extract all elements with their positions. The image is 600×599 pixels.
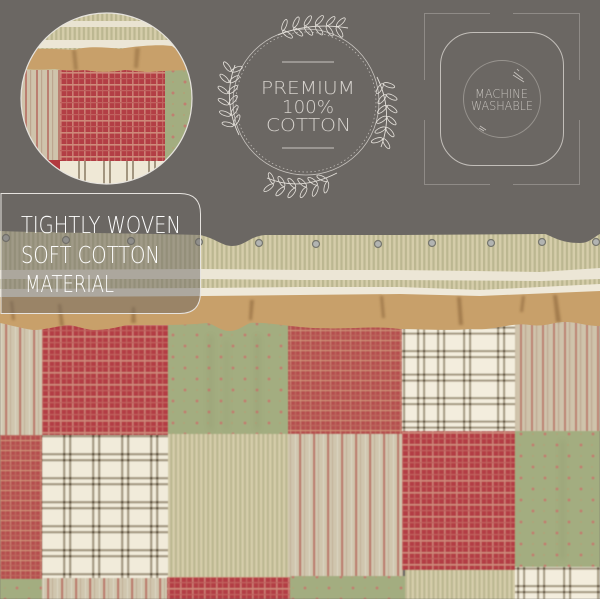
callout panel: [1, 194, 200, 314]
wreath text: [261, 78, 355, 136]
inner circle: [464, 60, 540, 138]
fabric fold shading: [208, 335, 565, 560]
wreath left branch: [217, 60, 244, 135]
glints: [479, 69, 524, 131]
wreath text: PREMIUM: [261, 78, 355, 99]
wreath text: COTTON: [266, 115, 351, 136]
curtain hooks: [2, 234, 600, 248]
callout text: SOFT COTTON: [21, 243, 160, 269]
ruffle: [0, 291, 600, 331]
panel: tightly woven callout: [1, 194, 200, 314]
wreath right branch: [370, 77, 399, 151]
icon: machine washable badge: [424, 14, 580, 184]
callout text: [21, 213, 181, 298]
curtain header: [0, 231, 600, 304]
callout text: MATERIAL: [25, 272, 114, 298]
icon: premium cotton wreath: [217, 14, 399, 199]
wreath bottom branch: [262, 171, 337, 199]
lace trims: [60, 21, 152, 27]
patchwork curtain panels: [0, 320, 600, 599]
washable text: [471, 87, 533, 113]
lower lace trim: [0, 284, 600, 300]
rounded square: [440, 32, 564, 166]
panel: fabric detail circle: [20, 12, 194, 187]
wreath text: 100%: [282, 97, 334, 118]
wreath top branch: [278, 14, 348, 42]
washable text: MACHINE: [475, 87, 528, 101]
ticking band: [0, 231, 600, 304]
callout text: TIGHTLY WOVEN: [21, 213, 181, 239]
outer brackets: [424, 14, 580, 184]
washable text: WASHABLE: [471, 99, 533, 113]
wreath rules: [282, 62, 334, 148]
upper lace trim: [0, 268, 600, 281]
